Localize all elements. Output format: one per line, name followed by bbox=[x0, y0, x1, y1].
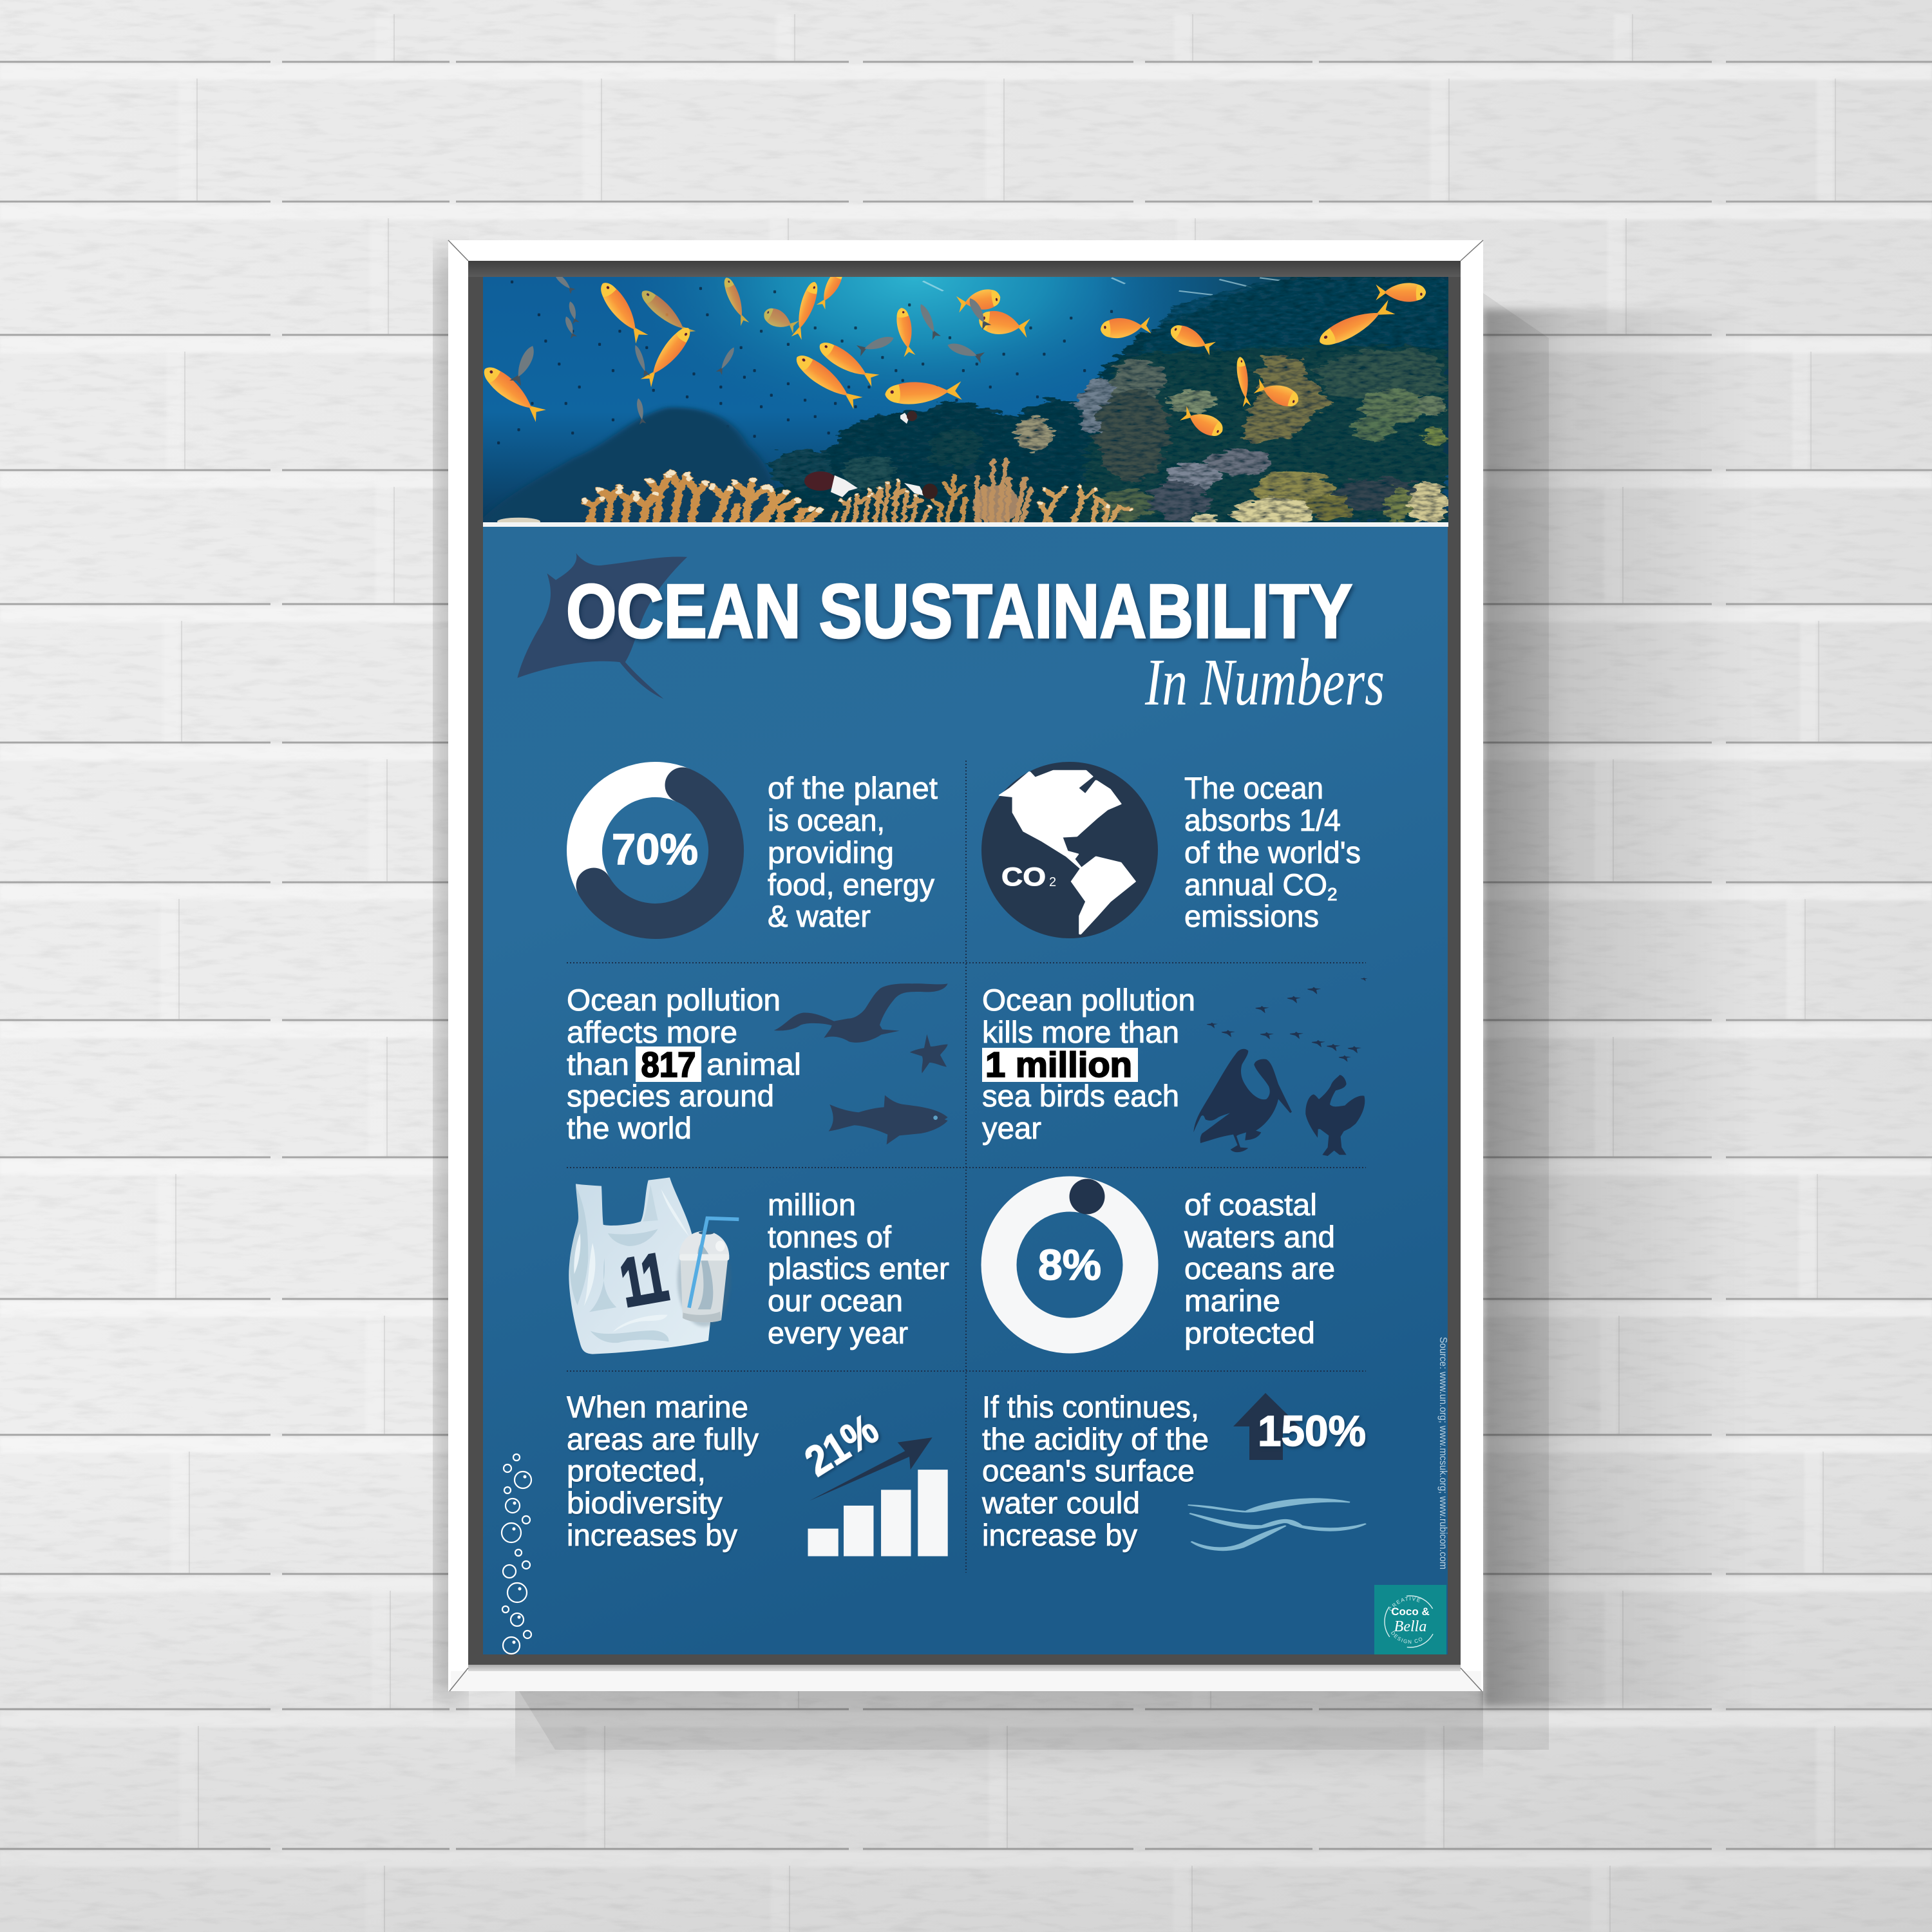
orange branching corals bbox=[585, 459, 1131, 524]
text: 8% coastal waters: marine bbox=[1184, 1283, 1280, 1318]
grey fish bbox=[509, 270, 991, 499]
icon: plastic bag and cup with 11 bbox=[569, 1177, 739, 1354]
grid dividers bbox=[567, 761, 1366, 1573]
photo: coral reef with fish bbox=[478, 267, 1448, 527]
text: ocean pollution 1 million: year bbox=[982, 1111, 1041, 1145]
text: marine areas protected: When marine bbox=[567, 1390, 748, 1424]
icon: up arrow with 150%: 150% bbox=[1258, 1407, 1366, 1455]
donut: 8%: 8% bbox=[1038, 1241, 1101, 1289]
text: ocean absorbs CO2: absorbs 1/4 bbox=[1184, 803, 1341, 837]
text: ocean absorbs CO2: 2 bbox=[1327, 884, 1338, 904]
text: marine areas protected: increases by bbox=[567, 1518, 737, 1552]
text: ocean pollution 817 bbox=[567, 983, 801, 1145]
white picture frame bbox=[448, 240, 1483, 1691]
icon: seagull, starfish and fish bbox=[774, 983, 948, 1144]
text: 70% of the planet: is ocean, bbox=[768, 803, 885, 837]
white band under photo bbox=[483, 522, 1448, 527]
icon: globe with CO2: 2 bbox=[1049, 875, 1056, 889]
text: ocean pollution 1 million bbox=[982, 983, 1195, 1145]
orange fish school bbox=[479, 267, 1426, 440]
text: ocean pollution 1 million: sea birds each bbox=[982, 1079, 1179, 1113]
sunlight ripples bbox=[923, 278, 1280, 295]
text: acidity continues: ocean's surface bbox=[982, 1454, 1195, 1488]
text: million tonnes of plastics: million bbox=[768, 1188, 856, 1222]
text: 70% of the planet: providing bbox=[768, 835, 894, 869]
text: ocean pollution 817: species around bbox=[567, 1079, 774, 1113]
text: million tonnes of plastics: plastics enter bbox=[768, 1251, 949, 1285]
donut: 70% bbox=[585, 779, 726, 921]
text: million tonnes of plastics: our ocean bbox=[768, 1283, 903, 1318]
subtitle: In Numbers bbox=[1144, 645, 1385, 719]
donut: 70%: 70% bbox=[612, 825, 698, 874]
text: ocean absorbs CO2: The ocean bbox=[1184, 771, 1323, 805]
text: marine areas protected: protected, bbox=[567, 1454, 706, 1488]
lilac coral columns bbox=[1077, 378, 1120, 434]
text: ocean absorbs CO2 bbox=[1184, 771, 1361, 933]
logo: Coco &amp; Bella: Bella bbox=[1394, 1618, 1426, 1635]
bar chart with rising arrow and 21% bbox=[797, 1405, 948, 1556]
text: million tonnes of plastics: every year bbox=[768, 1316, 908, 1350]
text: acidity continues bbox=[981, 1390, 1209, 1552]
title: OCEAN SUSTAINABILITY bbox=[566, 569, 1352, 654]
source note: Source: www.un.org; www.mcsuk.org; www.rubicon.com bbox=[1437, 1337, 1448, 1569]
text: 8% coastal waters: oceans are bbox=[1184, 1251, 1335, 1285]
manta ray silhouette bbox=[517, 553, 687, 699]
text: 8% coastal waters: of coastal bbox=[1184, 1188, 1317, 1222]
text: 70% of the planet: food, energy bbox=[768, 867, 934, 902]
text: million tonnes of plastics bbox=[768, 1188, 949, 1350]
text: marine areas protected: biodiversity bbox=[567, 1486, 723, 1520]
grey coral lumps bbox=[1166, 464, 1219, 493]
icon: waves bbox=[1188, 1499, 1366, 1550]
text: ocean pollution 817: 817 bbox=[641, 1045, 696, 1084]
text: 70% of the planet bbox=[768, 771, 938, 933]
distant reef mound bbox=[507, 405, 776, 502]
text: 8% coastal waters bbox=[1184, 1188, 1335, 1350]
text: 8% coastal waters: waters and bbox=[1184, 1220, 1335, 1254]
yellow boulder corals bbox=[1253, 470, 1334, 513]
olive fan coral bbox=[1245, 357, 1328, 442]
text: 70% of the planet: of the planet bbox=[768, 771, 938, 805]
bar chart with rising arrow and 21%: 21% bbox=[797, 1405, 886, 1485]
small dark fish specks bbox=[498, 274, 1112, 444]
dark reef mass bbox=[771, 277, 1448, 522]
text: acidity continues: the acidity of the bbox=[982, 1422, 1209, 1456]
text: marine areas protected bbox=[567, 1390, 759, 1552]
icon: pelicans and flock bbox=[1193, 978, 1368, 1156]
icon: up arrow with 150% bbox=[1233, 1393, 1366, 1460]
logo: Coco &amp; Bella: DESIGN CO bbox=[1391, 1631, 1422, 1643]
text: ocean pollution 817: the world bbox=[567, 1111, 692, 1145]
icon: plastic bag and cup with 11: 11 bbox=[616, 1240, 673, 1321]
frame shadow on wall bbox=[438, 254, 1754, 1781]
text: marine areas protected: areas are fully bbox=[567, 1422, 759, 1456]
text: ocean pollution 1 million: kills more than bbox=[982, 1015, 1179, 1049]
donut: 8% bbox=[999, 1179, 1141, 1336]
text: acidity continues: water could bbox=[981, 1486, 1140, 1520]
text: acidity continues: increase by bbox=[982, 1518, 1137, 1552]
text: ocean pollution 1 million: 1 million bbox=[985, 1045, 1132, 1084]
logo: Coco &amp; Bella: CREATIVE bbox=[1389, 1597, 1421, 1611]
logo: Coco &amp; Bella: Coco & bbox=[1391, 1605, 1430, 1618]
logo: Coco &amp; Bella bbox=[1374, 1585, 1446, 1654]
poster background bbox=[483, 277, 1448, 1654]
text: ocean pollution 817: than bbox=[567, 1047, 629, 1081]
text: ocean absorbs CO2: annual CO bbox=[1184, 867, 1327, 902]
text: ocean pollution 1 million: Ocean pollution bbox=[982, 983, 1195, 1017]
icon: globe with CO2 bbox=[981, 762, 1158, 938]
text: ocean pollution 817: animal bbox=[706, 1047, 801, 1081]
text: million tonnes of plastics: tonnes of bbox=[768, 1220, 892, 1254]
text: 8% coastal waters: protected bbox=[1184, 1316, 1315, 1350]
text: ocean absorbs CO2: emissions bbox=[1184, 899, 1319, 933]
text: 70% of the planet: & water bbox=[768, 899, 871, 933]
icon: globe with CO2: CO bbox=[1001, 863, 1046, 891]
text: ocean absorbs CO2: of the world's bbox=[1184, 835, 1361, 869]
icon: bubbles bbox=[502, 1454, 531, 1654]
text: ocean pollution 817: Ocean pollution bbox=[567, 983, 781, 1017]
text: acidity continues: If this continues, bbox=[982, 1390, 1199, 1424]
text: ocean pollution 817: affects more bbox=[567, 1015, 737, 1049]
